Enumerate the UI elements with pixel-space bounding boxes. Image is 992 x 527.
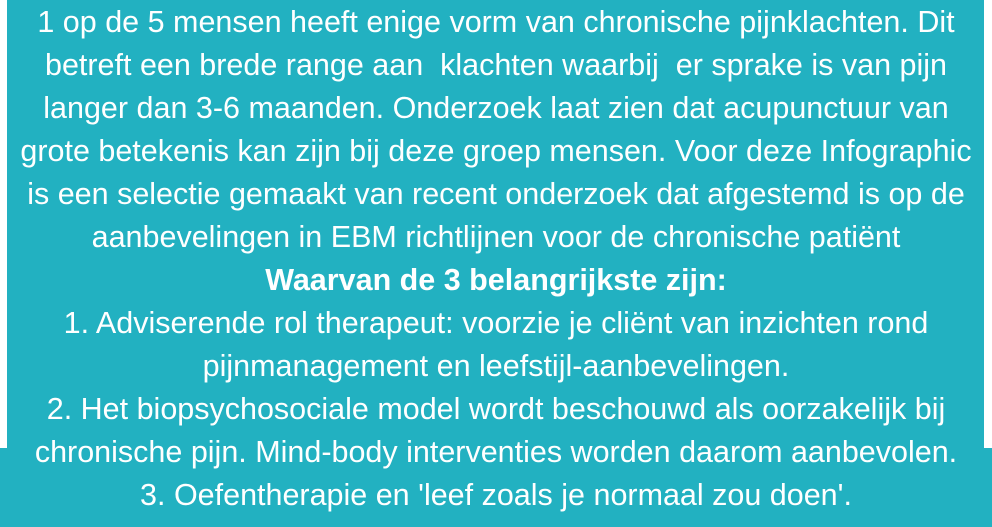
- text block: intro and key recommendations: betreft een brede range aan klachten waarbij er sprake is van pijn: [45, 48, 947, 82]
- text block: intro and key recommendations: is een selectie gemaakt van recent onderzoek dat afgestemd is op de: [27, 177, 965, 211]
- text block: intro and key recommendations: langer dan 3-6 maanden. Onderzoek laat zien dat acupunctuur van: [43, 91, 949, 125]
- text block: intro and key recommendations: aanbevelingen in EBM richtlijnen voor de chronische patiënt: [92, 220, 900, 254]
- text block: intro and key recommendations: 1 op de 5 mensen heeft enige vorm van chronische pijnklachten. Dit: [37, 5, 955, 39]
- text block: intro and key recommendations: grote betekenis kan zijn bij deze groep mensen. Voor deze Infographic: [20, 134, 972, 168]
- text block: intro and key recommendations: 1. Adviserende rol therapeut: voorzie je cliënt van inzichten rond: [64, 306, 928, 340]
- text block: intro and key recommendations: 2. Het biopsychosociale model wordt beschouwd als oorzakelijk bij: [47, 392, 945, 426]
- teal bottom band: [0, 448, 992, 527]
- text block: intro and key recommendations: 3. Oefentherapie en 'leef zoals je normaal zou doen'.: [140, 478, 852, 512]
- text block: intro and key recommendations: pijnmanagement en leefstijl-aanbevelingen.: [203, 349, 789, 383]
- text block: intro and key recommendations: Waarvan de 3 belangrijkste zijn:: [265, 263, 727, 297]
- text block: intro and key recommendations: chronische pijn. Mind-body interventies worden daarom aanbevolen.: [35, 435, 957, 469]
